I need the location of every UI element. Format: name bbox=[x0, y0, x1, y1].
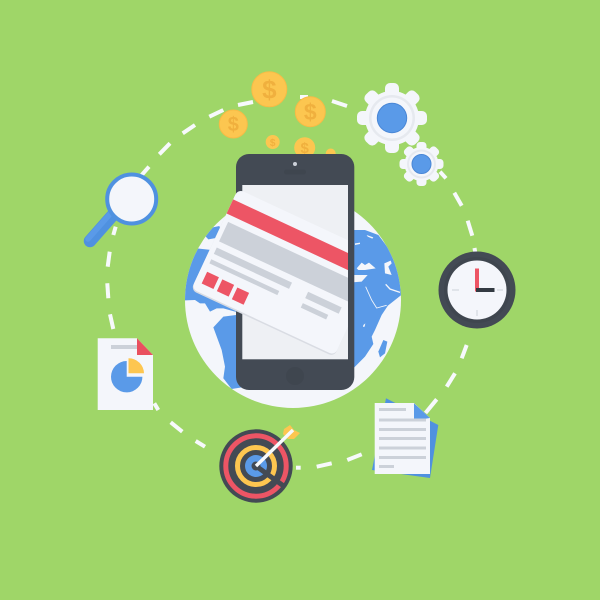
phone home button bbox=[286, 367, 304, 385]
coin 1: $ bbox=[262, 74, 277, 104]
document title bar bbox=[111, 345, 137, 349]
large gear bbox=[357, 83, 427, 153]
card signature band bbox=[219, 222, 348, 302]
icon: paper stack bbox=[372, 398, 438, 478]
clock hands bbox=[475, 268, 479, 292]
icon: report document bbox=[98, 338, 153, 410]
globe bbox=[185, 211, 401, 408]
card text lines bbox=[209, 248, 342, 323]
coin 3: $ bbox=[228, 114, 239, 136]
coin 4: $ bbox=[270, 138, 276, 149]
credit card bbox=[192, 191, 348, 355]
phone screen bbox=[242, 185, 348, 359]
phone camera bbox=[293, 162, 297, 166]
dashed orbit ring bbox=[107, 97, 476, 468]
continents: americas bbox=[185, 226, 242, 389]
coin 5: $ bbox=[301, 140, 310, 157]
phone speaker bbox=[284, 170, 306, 174]
arrow fletching bbox=[283, 425, 300, 439]
dash over paper bbox=[426, 399, 437, 413]
icon: clock bbox=[438, 252, 516, 328]
coin 6 bbox=[326, 148, 336, 158]
icon: gears bbox=[357, 83, 444, 186]
coins bbox=[219, 72, 336, 158]
icon: magnifying glass bbox=[88, 174, 156, 241]
document fold bbox=[137, 338, 153, 355]
smartphone bbox=[236, 154, 354, 390]
small gear bbox=[400, 142, 444, 186]
paper text lines bbox=[379, 408, 426, 468]
card stripe bbox=[226, 199, 348, 270]
pie chart bbox=[111, 358, 144, 392]
card red chips bbox=[201, 272, 250, 305]
clock ticks bbox=[452, 290, 503, 316]
continents: africa and eurasia bbox=[354, 230, 401, 368]
arrow shaft bbox=[256, 430, 293, 466]
coin 2: $ bbox=[304, 99, 317, 125]
icon: target with arrow bbox=[219, 425, 300, 503]
paper fold bbox=[414, 403, 430, 420]
